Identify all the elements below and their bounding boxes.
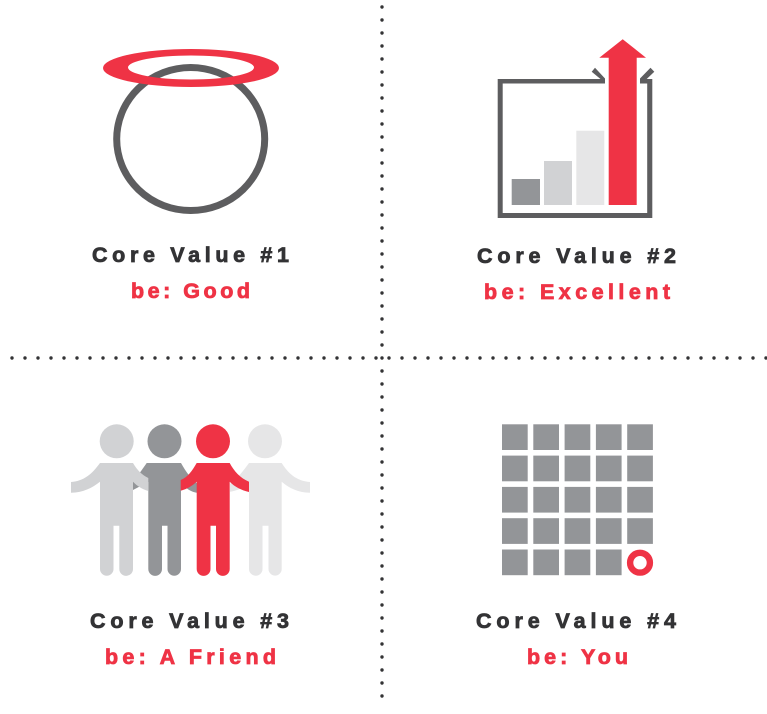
heading: core value 3: Core Value #3 [90,609,289,633]
person: red [181,424,249,576]
heading: core value 2: Core Value #2 [477,244,676,268]
text: be good: be: Good [131,279,250,303]
heading: core value 4: Core Value #4 [476,609,676,633]
bar 2 [544,161,572,205]
heading: core value 1: Core Value #1 [92,243,289,267]
person: light gray [230,424,310,576]
icon: bar chart breaking out of box [498,39,654,218]
person: dark gray [133,424,198,576]
bar 3 [576,131,604,205]
text: be excellent: be: Excellent [484,280,670,304]
text: be a friend: be: A Friend [105,645,276,669]
red arrow [599,39,646,205]
icon: grid of squares with one red ring [502,424,653,575]
red ring [630,553,650,573]
icon: halo over circle [103,49,279,210]
bar 1 [512,179,540,205]
icon: four linked people [71,424,310,576]
chart frame [498,68,654,218]
person: mid gray [71,424,148,576]
text: be you: be: You [527,645,628,669]
